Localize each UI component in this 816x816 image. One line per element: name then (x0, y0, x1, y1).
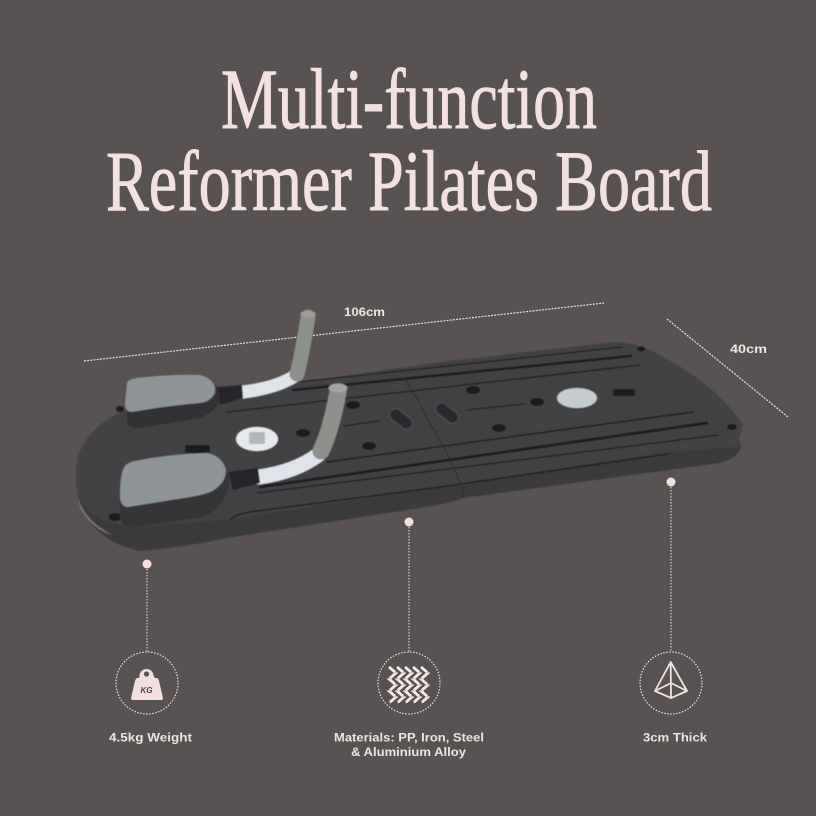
mounting slots (387, 400, 461, 432)
screws (109, 346, 737, 521)
short grooves (343, 404, 525, 426)
callout: thickness: 3cm Thick (643, 732, 708, 744)
square sockets (185, 389, 635, 453)
icon: pyramid (655, 662, 687, 698)
callout: thickness (640, 478, 708, 744)
board lower lip (78, 497, 112, 535)
callout: weight (109, 560, 192, 744)
icon: kettlebell weight (131, 669, 163, 700)
dimension: length 106cm: 106cm (344, 307, 385, 319)
back foot pad (125, 375, 220, 428)
dimension: width 40cm (667, 319, 788, 417)
board side (76, 430, 741, 551)
front handle (259, 384, 348, 477)
callout: materials: & Aluminium Alloy (351, 747, 467, 759)
front connector (228, 468, 260, 490)
callout: weight: 4.5kg Weight (109, 732, 192, 744)
back connector (217, 385, 243, 405)
icon: kettlebell weight: KG (140, 686, 152, 695)
fold line (405, 378, 463, 498)
icon: herringbone texture (389, 667, 428, 703)
rail slots (227, 347, 718, 520)
title: Multi-function (221, 51, 597, 147)
title (106, 51, 712, 229)
grey disc (557, 388, 597, 408)
dimension: length 106cm (84, 303, 604, 361)
callout: materials (334, 518, 484, 759)
product: reformer pilates board (76, 310, 743, 551)
white disc (236, 427, 278, 451)
front foot pad (120, 453, 229, 527)
back handle (243, 310, 316, 392)
dimension: width 40cm: 40cm (730, 344, 767, 356)
callout: materials: Materials: PP, Iron, Steel (334, 732, 484, 744)
board top face (76, 342, 743, 527)
